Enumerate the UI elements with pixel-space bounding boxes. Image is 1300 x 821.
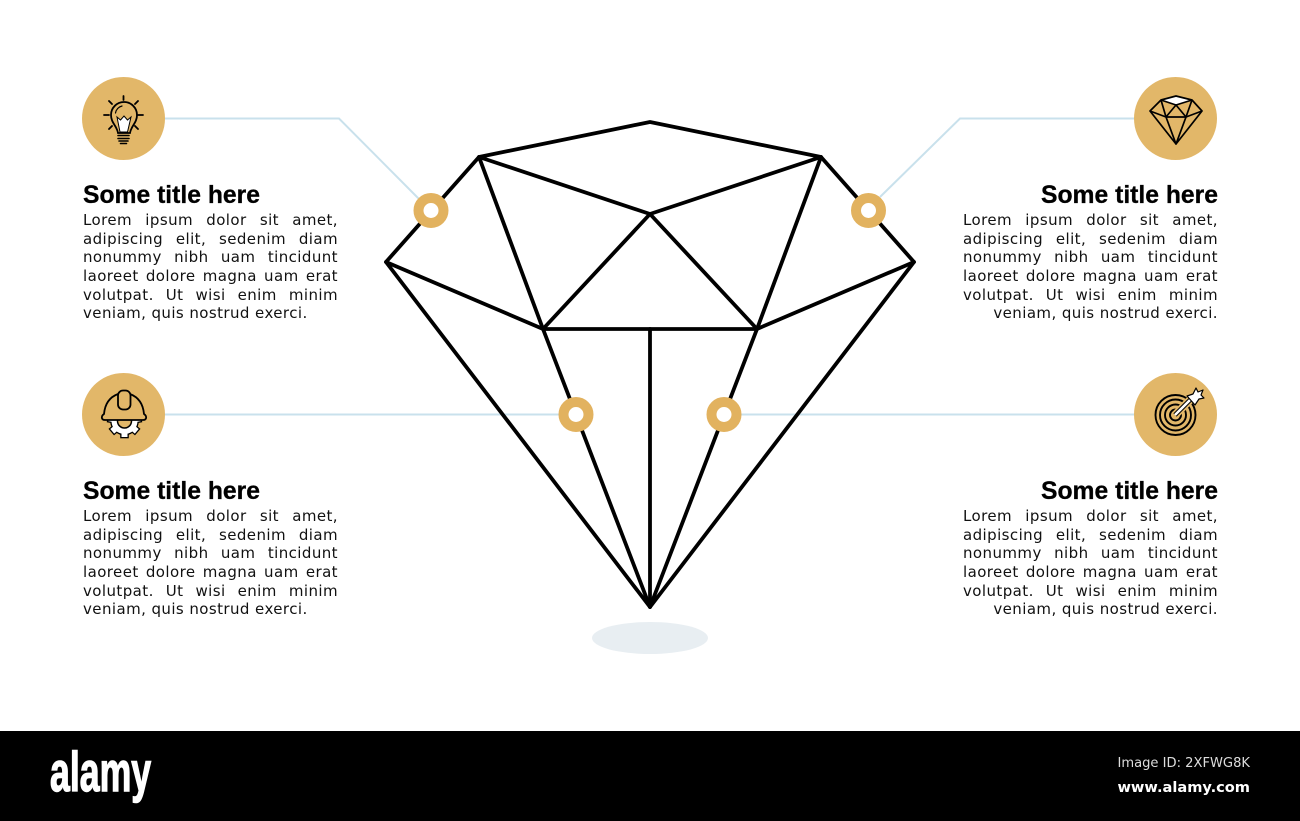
connector: top right <box>880 118 1135 197</box>
text block: bottom right: veniam, quis nostrud exerci. <box>993 600 1218 618</box>
ground shadow <box>592 622 708 654</box>
text block: top left: Some title here <box>83 182 260 209</box>
text block: bottom right: nonummy nibh uam tincidunt <box>963 544 1218 562</box>
watermark image id: Image ID: 2XFWG8K <box>1117 756 1250 771</box>
text block: bottom right: Some title here <box>1041 478 1218 505</box>
marker: bottom left <box>564 402 588 427</box>
text block: top right: laoreet dolore magna uam erat <box>963 267 1218 285</box>
text block: top left: Lorem ipsum dolor sit amet, <box>83 211 338 229</box>
text block: bottom left: nonummy nibh uam tincidunt <box>83 544 338 562</box>
text block: bottom left: laoreet dolore magna uam erat <box>83 563 338 581</box>
text block: bottom left: volutpat. Ut wisi enim minim <box>83 582 338 600</box>
text block: bottom left <box>83 478 338 618</box>
diamond <box>386 122 914 607</box>
text block: bottom right: adipiscing elit, sedenim diam <box>963 526 1218 544</box>
connector: bottom right <box>740 414 1135 416</box>
text block: bottom left: adipiscing elit, sedenim diam <box>83 526 338 544</box>
marker: top left <box>418 198 444 223</box>
text block: top right: veniam, quis nostrud exerci. <box>993 304 1218 322</box>
text block: top left: nonummy nibh uam tincidunt <box>83 248 338 266</box>
text block: bottom left: Lorem ipsum dolor sit amet, <box>83 507 338 525</box>
icon: target with arrow <box>1134 373 1217 456</box>
connector: top left <box>165 118 420 200</box>
marker: bottom right <box>712 402 736 427</box>
text block: top right: volutpat. Ut wisi enim minim <box>963 286 1218 304</box>
text block: bottom left: veniam, quis nostrud exerci. <box>83 600 308 618</box>
watermark bar <box>0 731 1300 821</box>
text block: top right: nonummy nibh uam tincidunt <box>963 248 1218 266</box>
text block: bottom right: Lorem ipsum dolor sit amet, <box>963 507 1218 525</box>
marker: top right <box>856 198 881 223</box>
text block: top right: Some title here <box>1041 182 1218 209</box>
text block: top left: adipiscing elit, sedenim diam <box>83 230 338 248</box>
icon: diamond <box>1134 77 1217 160</box>
text block: bottom left: Some title here <box>83 478 260 505</box>
watermark logo: alamy <box>50 740 151 803</box>
watermark url: www.alamy.com <box>1117 779 1250 796</box>
icon: light bulb <box>82 77 165 160</box>
text block: top left: volutpat. Ut wisi enim minim <box>83 286 338 304</box>
text block: top left <box>83 182 338 322</box>
icon: hard hat and gear <box>82 373 165 456</box>
text block: top left: veniam, quis nostrud exerci. <box>83 304 308 322</box>
text block: top right: adipiscing elit, sedenim diam <box>963 230 1218 248</box>
text block: bottom right: volutpat. Ut wisi enim minim <box>963 582 1218 600</box>
text block: top left: laoreet dolore magna uam erat <box>83 267 338 285</box>
text block: top right: Lorem ipsum dolor sit amet, <box>963 211 1218 229</box>
text block: bottom right <box>963 478 1218 618</box>
connector: bottom left <box>165 414 560 416</box>
text block: bottom right: laoreet dolore magna uam erat <box>963 563 1218 581</box>
text block: top right <box>963 182 1218 322</box>
